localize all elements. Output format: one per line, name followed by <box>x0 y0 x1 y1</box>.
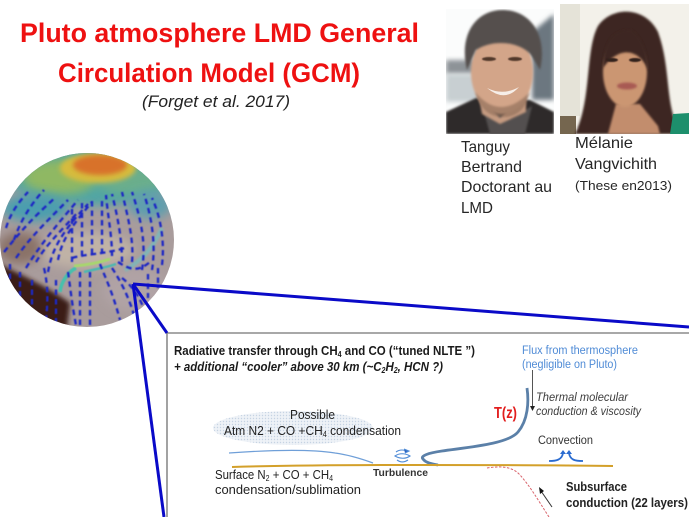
caption: Tanguy Bertrand <box>461 139 552 217</box>
citation: (Forget et al. 2017) <box>142 92 290 111</box>
panel heading: radiative transfer: Radiative transfer through CH <box>174 343 359 358</box>
panel heading: radiative transfer: + additional “cooler” above 30 km (~C <box>174 359 409 374</box>
label: possible condensation with cloud: condensation <box>327 423 401 438</box>
label: T(z): T(z) <box>494 405 517 422</box>
caption: Tanguy Bertrand: LMD <box>461 200 493 217</box>
caption: Tanguy Bertrand: Doctorant au <box>461 179 552 196</box>
label: thermal molecular conduction: conduction & viscosity <box>536 406 642 418</box>
label: surface condensation <box>215 467 361 497</box>
label: possible condensation with cloud: 4 <box>323 430 327 439</box>
label: thermal molecular conduction: Thermal molecular <box>536 392 629 404</box>
photo: Tanguy Bertrand <box>446 9 554 134</box>
panel heading: radiative transfer: 2 <box>393 366 398 375</box>
label: surface condensation: 4 <box>329 474 333 483</box>
caption: Tanguy Bertrand: Bertrand <box>461 159 522 176</box>
icon: turbulence swirl <box>395 449 410 462</box>
panel heading: radiative transfer <box>174 343 475 375</box>
label: possible condensation with cloud: Possible <box>290 407 335 422</box>
panel heading: radiative transfer: and CO (“tuned NLTE ”) <box>342 343 475 358</box>
zoom lines from globe to panel <box>133 284 689 517</box>
arrow: downward flux <box>530 370 535 411</box>
arrow: subsurface conduction <box>539 487 552 507</box>
panel heading: radiative transfer: H <box>385 359 394 374</box>
subsurface temperature profile <box>487 467 549 517</box>
caption: Mélanie Vangvichith: Mélanie <box>575 135 633 152</box>
caption: Mélanie Vangvichith: (These en2013) <box>575 178 672 193</box>
title: Pluto atmosphere LMD General <box>20 18 419 48</box>
panel heading: radiative transfer: , HCN ?) <box>397 359 443 374</box>
surface line <box>232 465 613 467</box>
label: convection: Convection <box>538 435 593 447</box>
label: surface condensation: 2 <box>266 474 270 483</box>
label: flux from thermosphere: (negligible on Pluto) <box>522 359 617 371</box>
panel heading: radiative transfer: 4 <box>338 350 342 359</box>
wind vectors <box>4 190 163 325</box>
title: Circulation Model (GCM) <box>58 58 360 88</box>
label: surface condensation: + CO + CH <box>270 467 329 482</box>
caption: Mélanie Vangvichith <box>575 135 672 193</box>
temperature profile curve <box>422 388 528 465</box>
near-surface condensation line <box>229 450 373 463</box>
label: subsurface conduction: Subsurface <box>566 479 627 494</box>
panel heading: radiative transfer: 2 <box>381 366 386 375</box>
label: turbulence: Turbulence <box>373 467 428 479</box>
label: possible condensation with cloud: Atm N2 + CO +CH <box>224 423 332 438</box>
title <box>20 18 419 88</box>
label: subsurface conduction <box>566 479 688 510</box>
photo: Mélanie Vangvichith <box>560 4 689 134</box>
label: flux from thermosphere: Flux from thermosphere <box>522 345 638 357</box>
label: possible condensation with cloud <box>213 407 401 445</box>
caption: Mélanie Vangvichith: Vangvichith <box>575 156 657 173</box>
label: surface condensation: condensation/sublimation <box>215 482 361 497</box>
label: flux from thermosphere <box>522 345 638 371</box>
callout frame: model schematic panel <box>167 333 689 517</box>
label: surface condensation: Surface N <box>215 467 273 482</box>
globe: Pluto wind field <box>0 153 174 327</box>
arrows: convection <box>549 450 583 461</box>
caption: Tanguy Bertrand: Tanguy <box>461 139 510 156</box>
label: thermal molecular conduction <box>536 392 642 418</box>
